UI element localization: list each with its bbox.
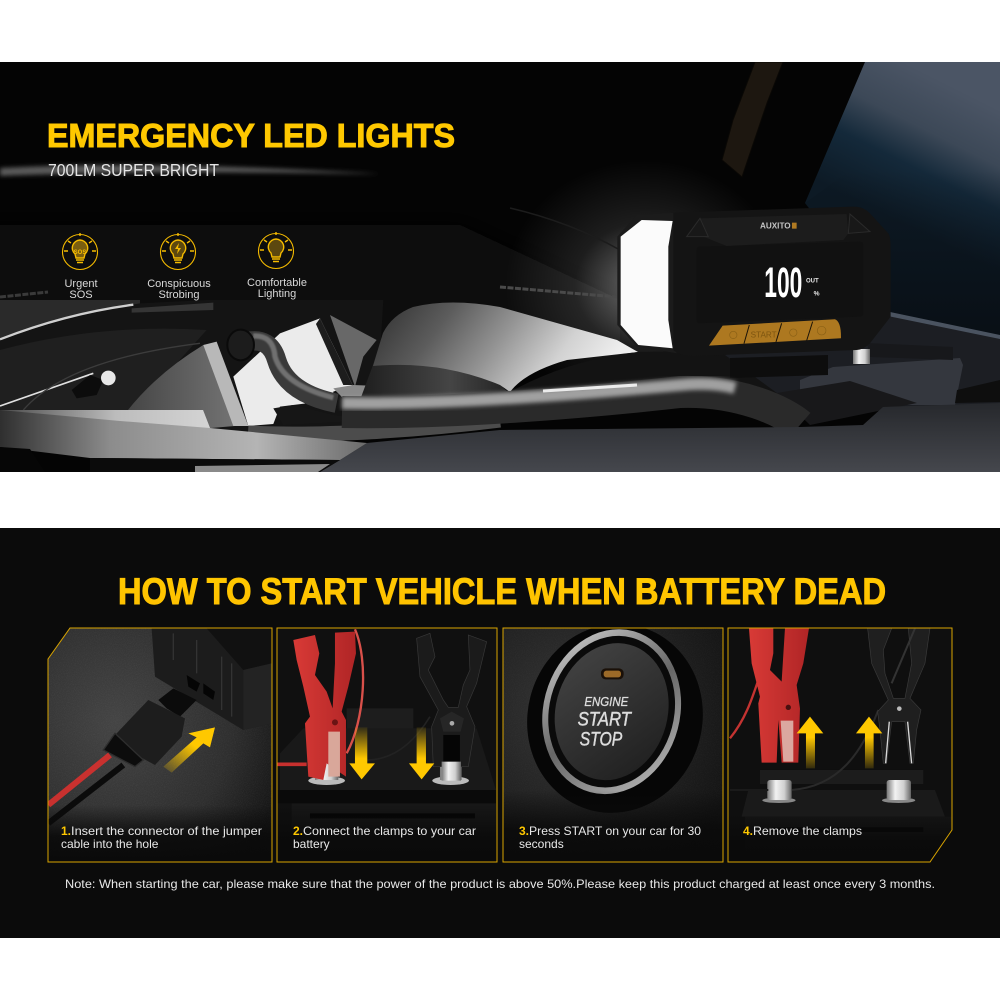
lamp housing	[617, 230, 674, 342]
heading: HOW TO START VEHICLE WHEN BATTERY DEAD	[118, 571, 886, 612]
step 4 panel	[728, 628, 952, 863]
label: Comfortable Lighting: Lighting	[258, 288, 296, 300]
step 4 caption: 4.	[743, 824, 753, 838]
label: Conspicuous Strobing: Strobing	[159, 289, 199, 301]
front fender	[0, 403, 1000, 472]
indicator	[601, 668, 624, 679]
LCD readout: 100	[764, 259, 802, 307]
battery	[760, 770, 923, 784]
air filter housing	[360, 302, 638, 400]
step 3 caption: seconds	[519, 837, 564, 851]
label: Comfortable Lighting: Comfortable	[247, 277, 307, 289]
sky behind the hood	[805, 62, 1000, 340]
engine parts	[273, 405, 293, 414]
terminal posts	[308, 776, 345, 785]
step 2 caption: 2.	[293, 824, 303, 838]
intake duct	[128, 344, 234, 428]
device	[152, 628, 244, 730]
lamp glow	[530, 181, 725, 366]
icon: SOS bulb: SOS	[74, 250, 86, 256]
hood grip	[722, 62, 783, 177]
hood highlight streak	[0, 165, 380, 176]
cables	[48, 755, 110, 805]
step 1 panel	[48, 628, 272, 862]
icon: SOS bulb	[62, 233, 98, 270]
red clamp	[749, 628, 809, 763]
step 2 panel	[277, 628, 497, 863]
step 2 caption: battery	[293, 837, 330, 851]
orange buttons	[709, 319, 841, 346]
panel: how to start vehicle	[0, 528, 1000, 938]
label: Urgent SOS: SOS	[69, 289, 93, 301]
LED lamp	[621, 220, 673, 348]
note: Note: When starting the car, please make sure that the power of the product is above 50%.Please keep this product charged at least once every 3 months.	[65, 877, 935, 891]
jump starter device	[617, 207, 891, 356]
step 3 panel: START	[578, 709, 632, 730]
arrows	[349, 727, 375, 779]
black clamp	[868, 628, 930, 763]
icon: comfortable light bulb	[258, 232, 294, 268]
bright hoses	[248, 384, 800, 434]
step 1 caption: 1.	[61, 824, 71, 838]
connector	[158, 688, 197, 717]
top cap	[726, 245, 736, 246]
arrows	[797, 717, 823, 768]
jump starter device: OUT	[806, 278, 819, 285]
jump starter device: %	[814, 290, 820, 297]
step 3 caption: 3.	[519, 824, 529, 838]
label: Conspicuous Strobing: Conspicuous	[147, 278, 211, 290]
icon: strobe bulb	[160, 233, 196, 270]
red clamp	[293, 632, 356, 780]
bay shadow	[0, 345, 379, 432]
cables	[792, 710, 878, 790]
label: Urgent SOS: Urgent	[64, 278, 98, 290]
bright trim line	[0, 305, 133, 339]
jump starter device: START	[751, 330, 777, 339]
subtitle: 700LM SUPER BRIGHT	[48, 160, 219, 180]
engine bay: left section	[0, 300, 379, 432]
under-device shadow	[514, 352, 777, 394]
device body	[673, 207, 891, 356]
arrow	[163, 727, 215, 773]
black hose	[247, 341, 337, 403]
logo: AUXITO	[760, 222, 791, 231]
dashed dash trim	[500, 287, 618, 297]
panel: emergency LED lights	[0, 62, 1000, 472]
step 1 caption: cable into the hole	[61, 837, 159, 851]
step 2 caption: Connect the clamps to your car	[303, 824, 476, 838]
title: EMERGENCY LED LIGHTS	[47, 118, 455, 155]
step 4 caption: Remove the clamps	[753, 824, 862, 838]
black clamp	[417, 633, 487, 767]
hood surface band	[0, 225, 606, 336]
step 3 panel: STOP	[580, 729, 622, 750]
button labels: ENGINE	[584, 694, 629, 709]
battery	[347, 708, 413, 730]
step 1 caption: Insert the connector of the jumper	[71, 824, 262, 838]
step 3 caption: Press START on your car for 30	[529, 824, 701, 838]
step 3 panel	[503, 604, 724, 862]
start button rings	[506, 604, 724, 833]
right engine bay	[725, 312, 1000, 425]
wire and bolt	[0, 373, 93, 406]
white panel	[233, 318, 353, 426]
cables	[277, 759, 307, 770]
